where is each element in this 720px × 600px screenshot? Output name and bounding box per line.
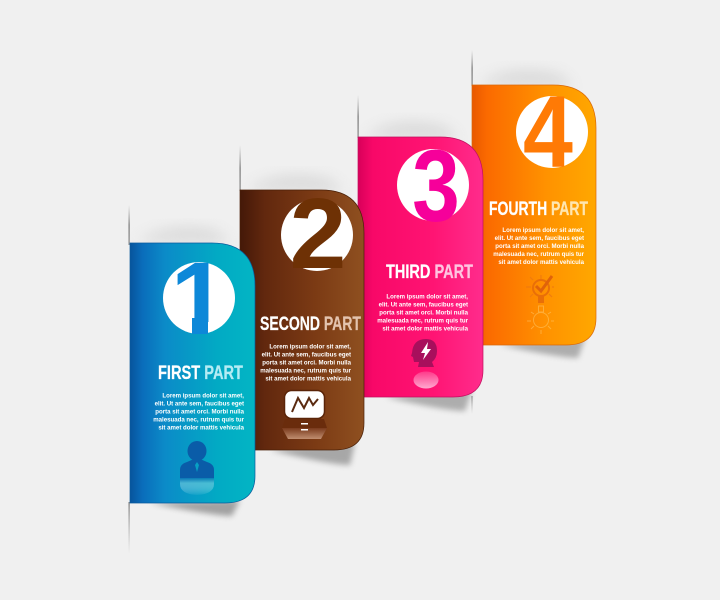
number circle with digit 4: 4 [523, 76, 573, 189]
number circle with digit 3 [397, 129, 469, 243]
card [472, 85, 596, 345]
card [130, 243, 255, 503]
number circle with digit 1: 1 [171, 241, 227, 355]
body text [493, 227, 585, 266]
body text: malesuada nec, rutrum quis tur [153, 416, 245, 424]
body text: sit amet dolor mattis vehicula [158, 424, 245, 432]
heading: SECOND PART [260, 314, 361, 335]
number circle with digit 4 [516, 76, 588, 189]
body text [377, 294, 469, 332]
body text: malesuada nec, rutrum quis tur [377, 318, 469, 324]
panel: second part [240, 145, 364, 465]
heading: THIRD PART [386, 262, 473, 283]
body text: porta sit amet orci. Morbi nulla [262, 360, 352, 366]
panel: third part [358, 95, 483, 414]
body text: porta sit amet orci. Morbi nulla [495, 243, 585, 250]
body text: Lorem ipsum dolor sit amet, [386, 294, 468, 300]
body text: elit. Ut ante sem, faucibus eget [495, 235, 584, 242]
number circle with digit 1 [163, 262, 235, 334]
body text: elit. Ut ante sem, faucibus eget [262, 352, 351, 358]
body text: elit. Ut ante sem, faucibus eget [155, 400, 244, 408]
body text: Lorem ipsum dolor sit amet, [269, 344, 351, 350]
number circle with digit 3: 3 [412, 129, 460, 243]
body text: malesuada nec, rutrum quis tur [260, 368, 352, 374]
number circle with digit 2: 2 [290, 179, 346, 290]
body text [153, 392, 245, 432]
card [240, 190, 364, 450]
icon: laptop with chart [282, 390, 327, 439]
body text: porta sit amet orci. Morbi nulla [155, 408, 245, 416]
heading: FOURTH PART [489, 199, 588, 220]
body text: Lorem ipsum dolor sit amet, [502, 227, 584, 234]
body text: sit amet dolor mattis vehicula [498, 259, 585, 266]
body text: elit. Ut ante sem, faucibus eget [379, 302, 468, 308]
slit and shadows [472, 50, 585, 358]
body text: malesuada nec, rutrum quis tur [493, 251, 585, 258]
card [358, 137, 483, 397]
slit and shadows [358, 95, 472, 414]
panel: fourth part [472, 50, 596, 358]
body text [260, 344, 352, 382]
body text: porta sit amet orci. Morbi nulla [379, 310, 469, 316]
icon: business person [180, 441, 214, 495]
icon: light bulb with check [526, 275, 554, 334]
slit and shadows [240, 145, 355, 465]
icon: head with lightning bolt [411, 339, 438, 388]
panel: first part [128, 205, 255, 554]
body text: Lorem ipsum dolor sit amet, [162, 392, 244, 400]
body text: sit amet dolor mattis vehicula [382, 326, 469, 332]
slit and shadows [128, 205, 240, 554]
body text: sit amet dolor mattis vehicula [265, 376, 352, 382]
heading: FIRST PART [158, 363, 243, 384]
